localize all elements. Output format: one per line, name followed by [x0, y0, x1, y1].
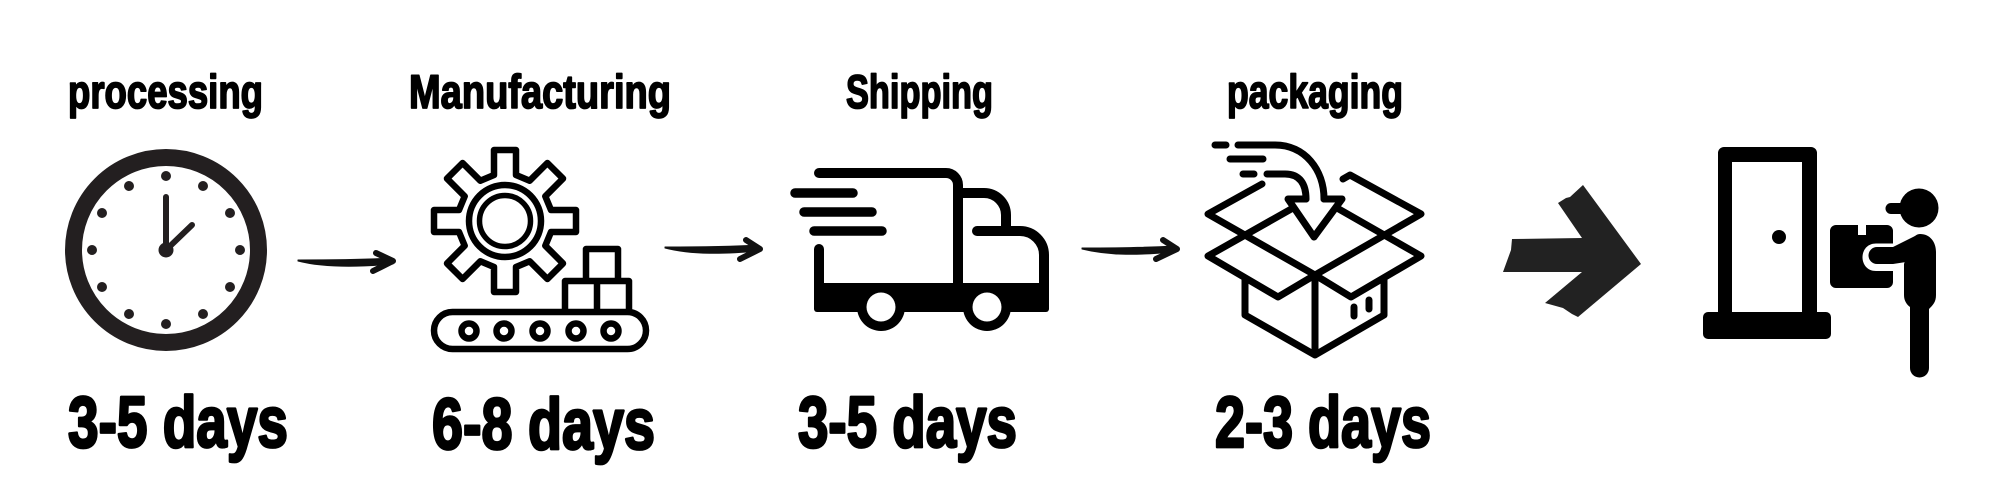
heading: Manufacturing: Manufacturing	[409, 65, 671, 118]
icon: delivery truck	[795, 173, 1049, 331]
parcel	[1830, 225, 1893, 288]
arrow: shipping to packaging	[1082, 240, 1177, 259]
arrow: manufacturing to shipping	[665, 240, 760, 259]
arrow: processing to manufacturing	[298, 253, 393, 271]
person	[1900, 188, 1938, 228]
icon: door and delivery person	[1703, 147, 1938, 378]
days: 3-5 days: 3-5 days	[68, 383, 288, 463]
icon: clock	[74, 158, 258, 342]
days: 3-5 days: 3-5 days	[798, 383, 1017, 463]
conveyor belt	[434, 312, 646, 349]
arrow: tape arrow to delivery	[1503, 185, 1641, 317]
icon: gear and conveyor	[434, 150, 646, 349]
days: 6-8 days: 6-8 days	[432, 385, 655, 465]
heading: processing: processing	[68, 65, 263, 118]
door	[1718, 147, 1817, 315]
gear	[434, 150, 576, 292]
heading: packaging: packaging	[1227, 65, 1403, 118]
stacked boxes	[565, 249, 629, 313]
heading: Shipping: Shipping	[846, 65, 993, 118]
days: 2-3 days: 2-3 days	[1215, 383, 1431, 463]
icon: open box	[1208, 145, 1421, 355]
arm with white outline	[1862, 244, 1894, 271]
